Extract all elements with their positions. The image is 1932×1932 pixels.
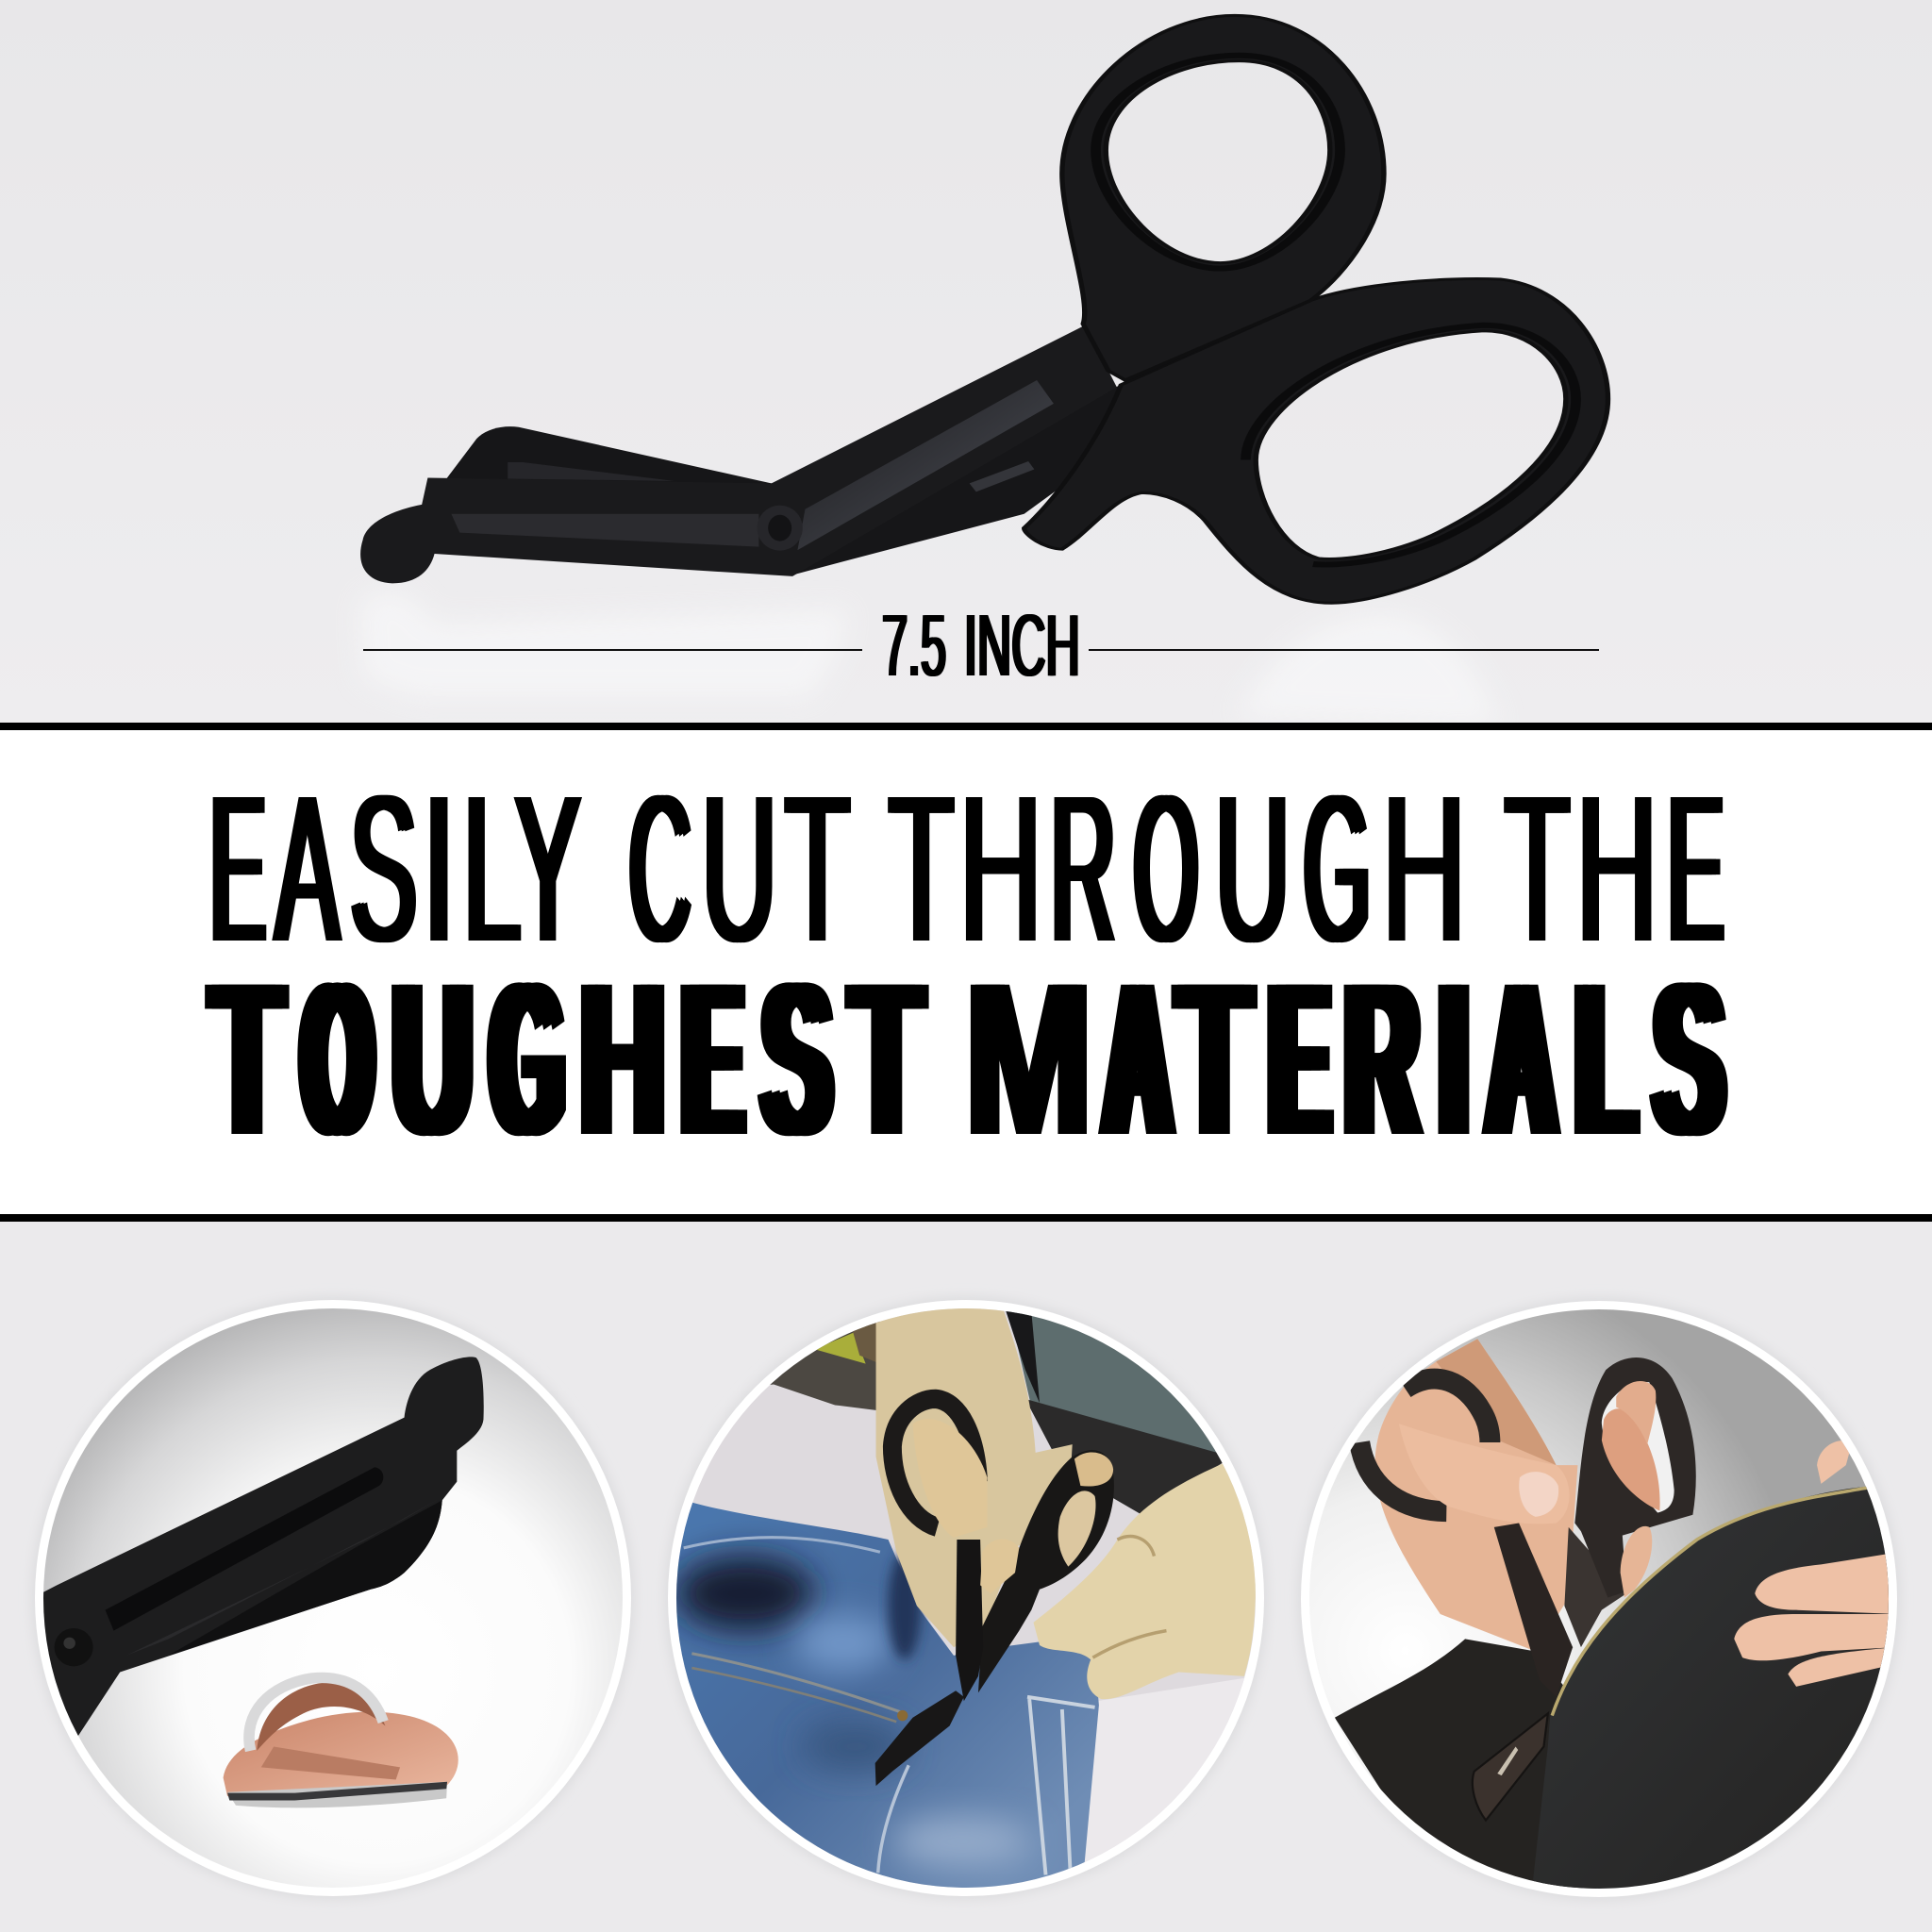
headline line 1: S [350,752,417,985]
top panel background [0,0,1932,723]
headline line 1: A [275,752,340,985]
headline line 1: U [1215,752,1290,985]
circle: blade tip cutting a coin [25,1292,641,1906]
dimension label: 7.5 inch [882,596,1080,694]
headline line 1: C [629,752,691,985]
headline line 2: T [210,938,283,1180]
circle: cutting through jeans [660,1292,1274,1906]
headline line 2: I [1439,938,1469,1180]
right hand fingers [1734,1441,1900,1687]
headline line 2: A [1105,938,1171,1180]
back blade [442,385,1121,575]
headline line 2: R [1345,938,1418,1180]
headline line 2: U [392,938,473,1180]
measurement line right [1089,649,1599,651]
blade in close-up [25,1357,484,1736]
headline line 1: H [959,752,1042,985]
headline line 2: S [1654,938,1724,1180]
headline line 2: E [1271,938,1328,1180]
upper finger loop [1062,15,1384,380]
headline line 1: E [210,752,266,985]
denim jeans [667,1503,1099,1895]
headline line 1: H [1576,752,1657,985]
main scissors photo [360,15,1608,603]
headline line 2: T [1176,938,1253,1180]
headline line 1: T [889,752,954,985]
headline line 1: O [1134,752,1198,985]
left glove [876,1307,1073,1647]
glove fingers [936,1432,1019,1587]
measurement line left [363,649,862,651]
background objects [770,1311,1243,1862]
headline line 1 [210,752,1728,1136]
lower finger loop [1024,279,1608,603]
headline line 2: T [850,938,923,1180]
dimension label: 7.5 inch: 7.5 [882,596,946,694]
headline line 2: M [965,938,1092,1180]
scissors reflection [387,621,1455,698]
scissors left handle [1359,1379,1490,1511]
right glove [1034,1463,1256,1699]
thumb [1399,1424,1570,1524]
dimension label: 7.5 inch: INCH [964,596,1080,694]
headline line 2: S [762,938,832,1180]
headline line 2: L [1576,938,1635,1180]
headline line 1: Y [515,752,581,985]
headline line 1: E [1668,752,1724,985]
circle: cutting through neoprene [1292,1292,1906,1906]
headline line 2: A [1488,938,1556,1180]
gloved hand scissors [875,1399,1114,1786]
lower panel background [0,1222,1932,1932]
headline line 1: H [1382,752,1466,985]
headline rule bottom [0,1214,1932,1222]
headline line 1: U [702,752,776,985]
headline line 2: E [684,938,741,1180]
headline line 1: I [425,752,454,985]
cut coin [224,1677,458,1807]
headline line 1: R [1051,752,1115,985]
headline line 2 [205,938,1728,1180]
headline line 1: L [463,752,521,985]
scissors blades and right handle [1473,1357,1696,1821]
headline line 2: H [579,938,665,1180]
headline line 1: T [785,752,850,985]
headline line 2: G [491,938,562,1180]
headline line 2: O [303,938,373,1180]
headline line 1: G [1304,752,1370,985]
front blade [360,326,1117,583]
headline rule top [0,723,1932,730]
headline line 1: T [1505,752,1570,985]
headline band [0,730,1932,1214]
black fabric [1335,1486,1900,1895]
left hand [1375,1339,1577,1652]
